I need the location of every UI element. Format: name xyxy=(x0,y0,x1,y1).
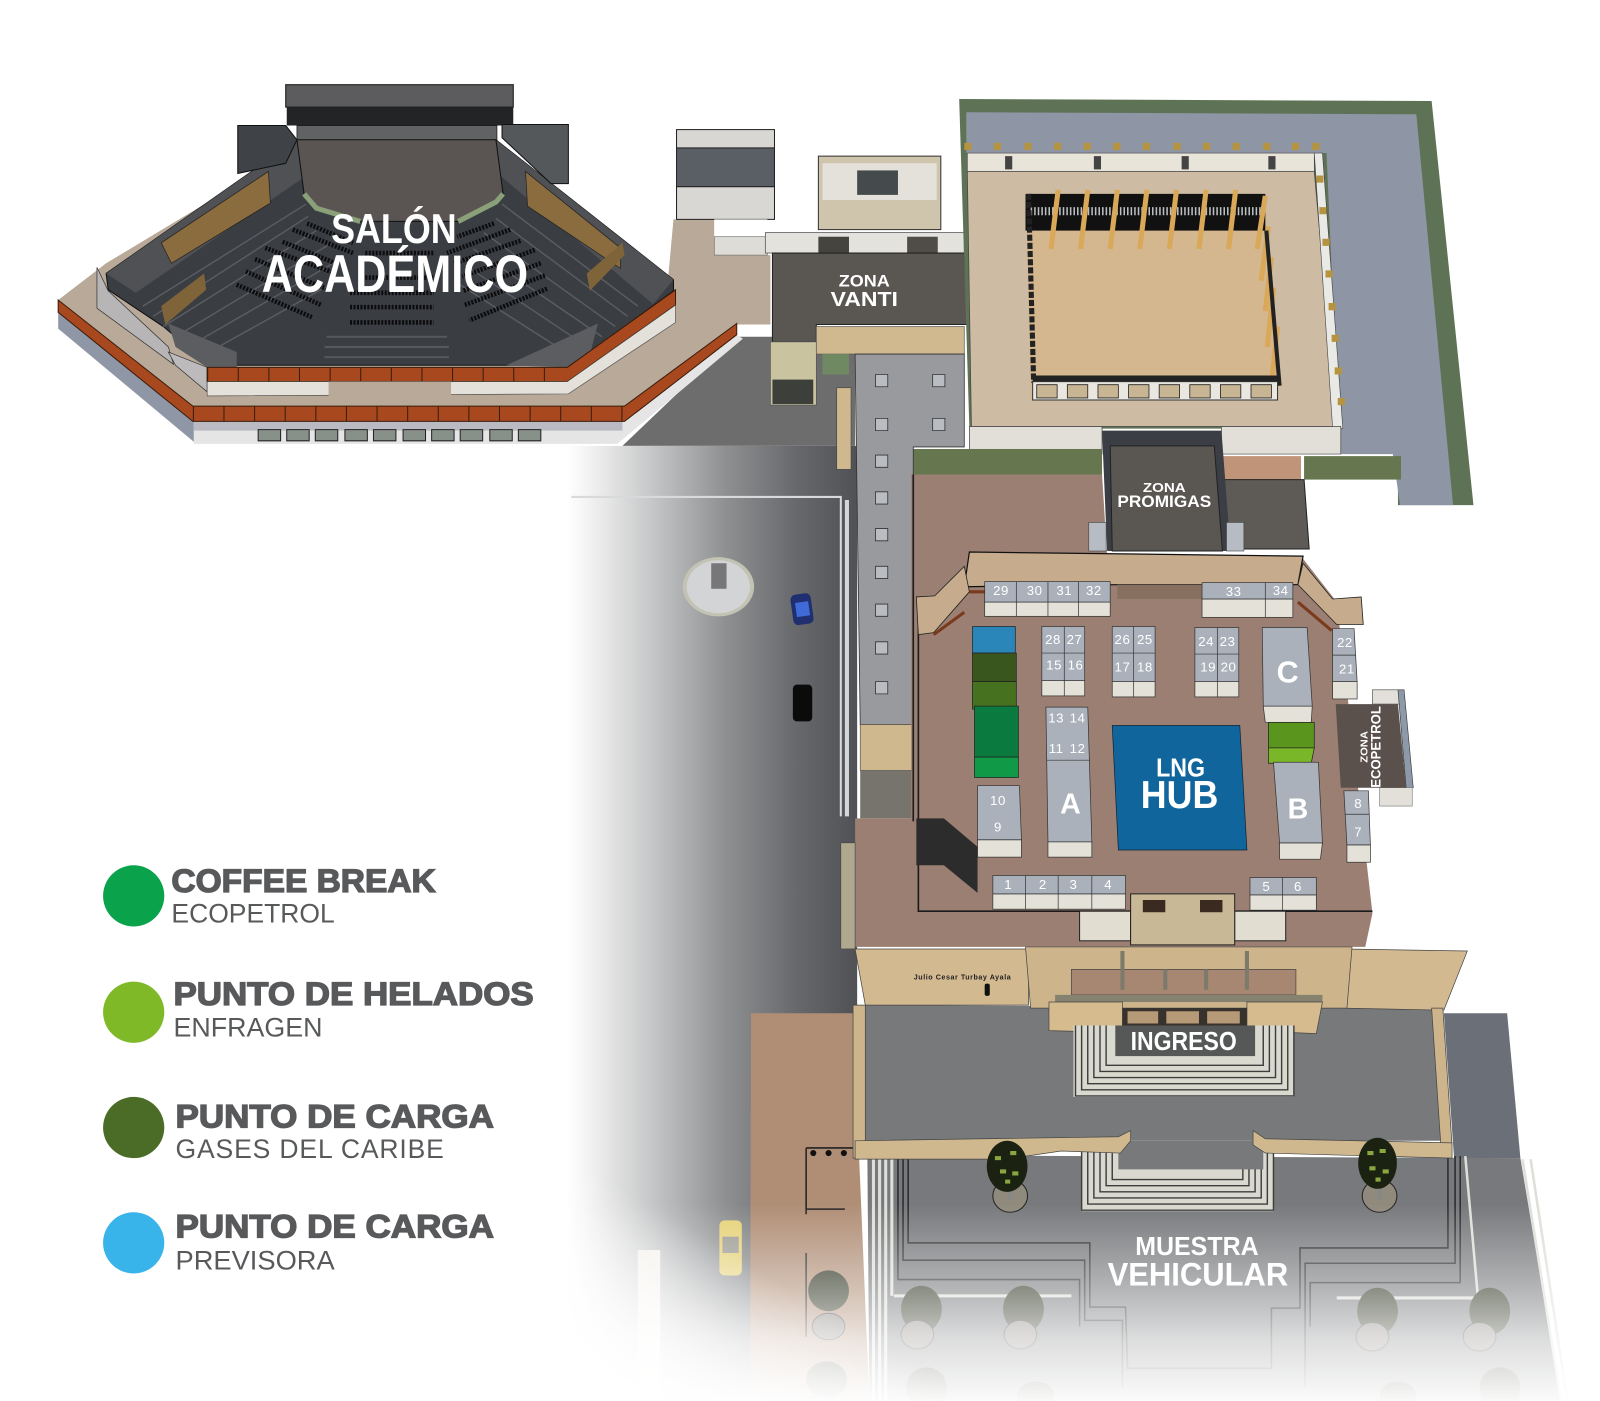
Ingreso label: INGRESO xyxy=(1131,1028,1237,1056)
right blue-grey ground xyxy=(1444,1013,1520,1158)
aisle steps xyxy=(324,337,449,357)
lower stairs xyxy=(1082,1141,1273,1211)
front wall xyxy=(969,427,1102,454)
road and square xyxy=(566,337,857,1401)
facade left panel: Julio Cesar Turbay Ayala xyxy=(914,974,1012,982)
stands 29-32: 29 xyxy=(993,583,1009,598)
wood panels xyxy=(161,171,624,324)
stand: coffee break xyxy=(974,706,1018,778)
stands 19-20, 23-24: 20 xyxy=(1221,659,1236,674)
stands 21-22: 22 xyxy=(1337,635,1353,650)
lower plaza lines xyxy=(898,1153,1460,1388)
Salón Académico label: SALÓN xyxy=(331,204,457,252)
perimeter posts xyxy=(964,143,1345,405)
central entrance xyxy=(1026,947,1352,1034)
upper service building xyxy=(818,156,941,230)
stands 21-22 xyxy=(1333,629,1357,699)
car: black xyxy=(793,685,812,721)
stands 17-18, 25-26: 25 xyxy=(1137,632,1153,647)
top black band xyxy=(1026,194,1265,231)
lower concrete xyxy=(168,323,237,367)
Salón Académico label: ACADÉMICO xyxy=(262,244,528,304)
Salón Académico label xyxy=(262,204,528,304)
stands 1-4: 4 xyxy=(1104,877,1112,892)
courtyard bottom windows xyxy=(1033,376,1278,400)
legend: coffee break xyxy=(103,862,436,928)
Zona Vanti: ZONA xyxy=(839,273,890,291)
white partitions xyxy=(97,267,173,364)
stands 19-20, 23-24: 23 xyxy=(1220,634,1235,649)
courtyard right edge xyxy=(1266,231,1280,386)
stands 29-32: 31 xyxy=(1056,583,1072,598)
Zona Promigas: ZONA xyxy=(1143,480,1186,495)
legend: helados xyxy=(103,975,534,1043)
LNG Hub xyxy=(1112,725,1247,850)
stands 17-18, 25-26 xyxy=(1112,627,1155,697)
stands 17-18, 25-26: 18 xyxy=(1137,659,1153,674)
Muestra Vehicular label: VEHICULAR xyxy=(1108,1256,1288,1293)
side facade xyxy=(58,310,194,442)
stage lip xyxy=(304,194,503,221)
plaza floor xyxy=(855,474,1372,947)
stands 11-14 and A: 13 xyxy=(1048,710,1064,725)
inner railing xyxy=(207,290,676,382)
Zona Ecopetrol xyxy=(1336,690,1413,806)
hall walls xyxy=(916,552,1363,635)
stands 15-16, 27-28: 16 xyxy=(1068,657,1083,672)
car: yellow taxi xyxy=(719,1220,742,1275)
corner fade xyxy=(566,1122,1020,1401)
step lines right xyxy=(1465,1156,1567,1401)
stands 33-34: 33 xyxy=(1226,584,1242,599)
stands 7-8 xyxy=(1344,791,1370,862)
stands 5-6: 5 xyxy=(1262,879,1270,894)
hall interior xyxy=(106,140,673,365)
front facade xyxy=(194,335,743,444)
stands 1-4 xyxy=(993,875,1126,909)
stands 29-32: 32 xyxy=(1086,583,1102,598)
stands 11-14 and A xyxy=(1046,707,1092,857)
bottom fade xyxy=(566,1204,1600,1401)
west edge of plaza xyxy=(913,474,1372,911)
light path xyxy=(894,1296,1480,1298)
forecourt side beams xyxy=(853,1005,1452,1158)
stands 15-16, 27-28: 28 xyxy=(1045,632,1061,647)
stands 15-16, 27-28: 27 xyxy=(1067,632,1082,647)
stands 9-10: 9 xyxy=(994,820,1002,835)
facade left panel xyxy=(855,949,1029,1005)
brick sidewalk xyxy=(750,1013,869,1401)
stands 19-20, 23-24: 19 xyxy=(1200,659,1216,674)
legend: carga Previsora: PREVISORA xyxy=(176,1245,335,1275)
stands 21-22: 21 xyxy=(1339,661,1355,676)
Zona Promigas xyxy=(1089,431,1244,551)
inner white facade xyxy=(207,305,676,396)
stands 11-14 and A: 14 xyxy=(1070,710,1085,725)
legend xyxy=(103,862,534,1275)
trees xyxy=(806,1138,1520,1401)
stands 29-32 xyxy=(985,582,1110,616)
stand B: B xyxy=(1288,793,1308,825)
legend: helados: PUNTO DE HELADOS xyxy=(173,975,534,1012)
inner ledge xyxy=(329,382,451,396)
stands 11-14 and A: 12 xyxy=(1070,741,1085,756)
legend: coffee break: ECOPETROL xyxy=(171,898,335,928)
right white strip xyxy=(1314,153,1343,429)
stands 1-4: 3 xyxy=(1070,877,1077,892)
legend: carga Gases del Caribe: PUNTO DE CARGA xyxy=(176,1098,494,1135)
building: Salón Académico xyxy=(58,85,770,444)
stand C: C xyxy=(1277,656,1299,690)
Zona Ecopetrol: ZONA xyxy=(1359,730,1370,763)
stands 5-6: 6 xyxy=(1294,879,1302,894)
white band above Zona Vanti xyxy=(765,233,964,253)
stands 29-32: 30 xyxy=(1027,583,1043,598)
entrance steps xyxy=(1073,1025,1294,1097)
stands 17-18, 25-26: 17 xyxy=(1115,659,1130,674)
stands 9-10 xyxy=(978,786,1021,857)
green perimeter xyxy=(959,99,1473,505)
stands 19-20, 23-24: 24 xyxy=(1198,634,1214,649)
stand: carga Previsora xyxy=(972,627,1015,653)
top white strip xyxy=(967,153,1314,171)
stage xyxy=(297,140,503,221)
plaza east side room xyxy=(1224,480,1309,549)
legend: coffee break: COFFEE BREAK xyxy=(171,862,436,899)
legend: carga Previsora xyxy=(103,1208,494,1275)
corridor xyxy=(855,354,964,818)
stands 7-8: 7 xyxy=(1354,825,1362,840)
lower plaza xyxy=(867,1153,1567,1401)
courtyard floor xyxy=(1026,194,1278,400)
legend: carga Gases del Caribe: GASES DEL CARIBE xyxy=(176,1134,444,1164)
inner railing joints xyxy=(207,367,567,381)
stand: carga Gases del Caribe xyxy=(972,653,1016,709)
legend: helados: ENFRAGEN xyxy=(173,1013,322,1043)
stands 17-18, 25-26: 26 xyxy=(1115,632,1130,647)
courtyard left edge xyxy=(1029,194,1034,383)
Zona Vanti: VANTI xyxy=(831,289,898,311)
hedges xyxy=(913,449,1401,480)
beige roof xyxy=(967,171,1337,427)
stands 19-20, 23-24 xyxy=(1195,628,1239,697)
outer railing joints xyxy=(193,406,624,421)
stands 33-34 xyxy=(1202,583,1293,617)
step lines left xyxy=(873,1155,892,1401)
stands 9-10: 10 xyxy=(990,793,1006,808)
seating tiers xyxy=(143,204,638,357)
facade right panel xyxy=(1342,949,1467,1010)
stands 7-8: 8 xyxy=(1354,796,1362,811)
blue-grey roof xyxy=(966,112,1453,505)
LNG Hub: LNG xyxy=(1156,755,1205,783)
legend: carga Gases del Caribe xyxy=(103,1097,494,1164)
courtyard building xyxy=(959,99,1473,505)
stand C xyxy=(1262,628,1312,722)
stands 11-14 and A: A xyxy=(1060,788,1081,820)
upper forecourt xyxy=(865,1005,1444,1141)
annex building xyxy=(677,130,774,255)
stands 15-16, 27-28: 15 xyxy=(1046,657,1062,672)
stage house xyxy=(238,85,568,184)
LNG Hub: HUB xyxy=(1141,774,1218,817)
Zona Promigas: PROMIGAS xyxy=(1117,493,1211,511)
Zona Vanti xyxy=(772,253,967,342)
forecourt front wall xyxy=(855,1131,1452,1159)
floor terrace xyxy=(58,143,770,406)
Muestra Vehicular label xyxy=(1108,1233,1288,1293)
black wedge wall xyxy=(916,818,978,893)
Zona Ecopetrol: ECOPETROL xyxy=(1369,706,1384,788)
side blocks by street xyxy=(841,843,855,949)
front wall right xyxy=(1221,427,1341,454)
stands 1-4: 2 xyxy=(1039,877,1047,892)
side walls xyxy=(106,140,302,293)
Muestra Vehicular label: MUESTRA xyxy=(1135,1233,1259,1261)
legend: carga Previsora: PUNTO DE CARGA xyxy=(176,1208,494,1245)
stand B xyxy=(1273,762,1322,859)
wood slats xyxy=(1051,190,1278,386)
hall entrance xyxy=(1080,894,1286,945)
fountain xyxy=(683,557,754,616)
stands 11-14 and A: 11 xyxy=(1049,741,1064,756)
stands 1-4: 1 xyxy=(1004,877,1012,892)
outer railing xyxy=(58,300,737,421)
stand: helados xyxy=(1268,722,1314,763)
connector block xyxy=(770,327,964,469)
stands 33-34: 34 xyxy=(1273,583,1288,598)
stands 5-6 xyxy=(1250,878,1316,910)
stands 15-16, 27-28 xyxy=(1042,627,1085,696)
car: blue xyxy=(790,593,814,626)
seat rows xyxy=(237,223,547,322)
